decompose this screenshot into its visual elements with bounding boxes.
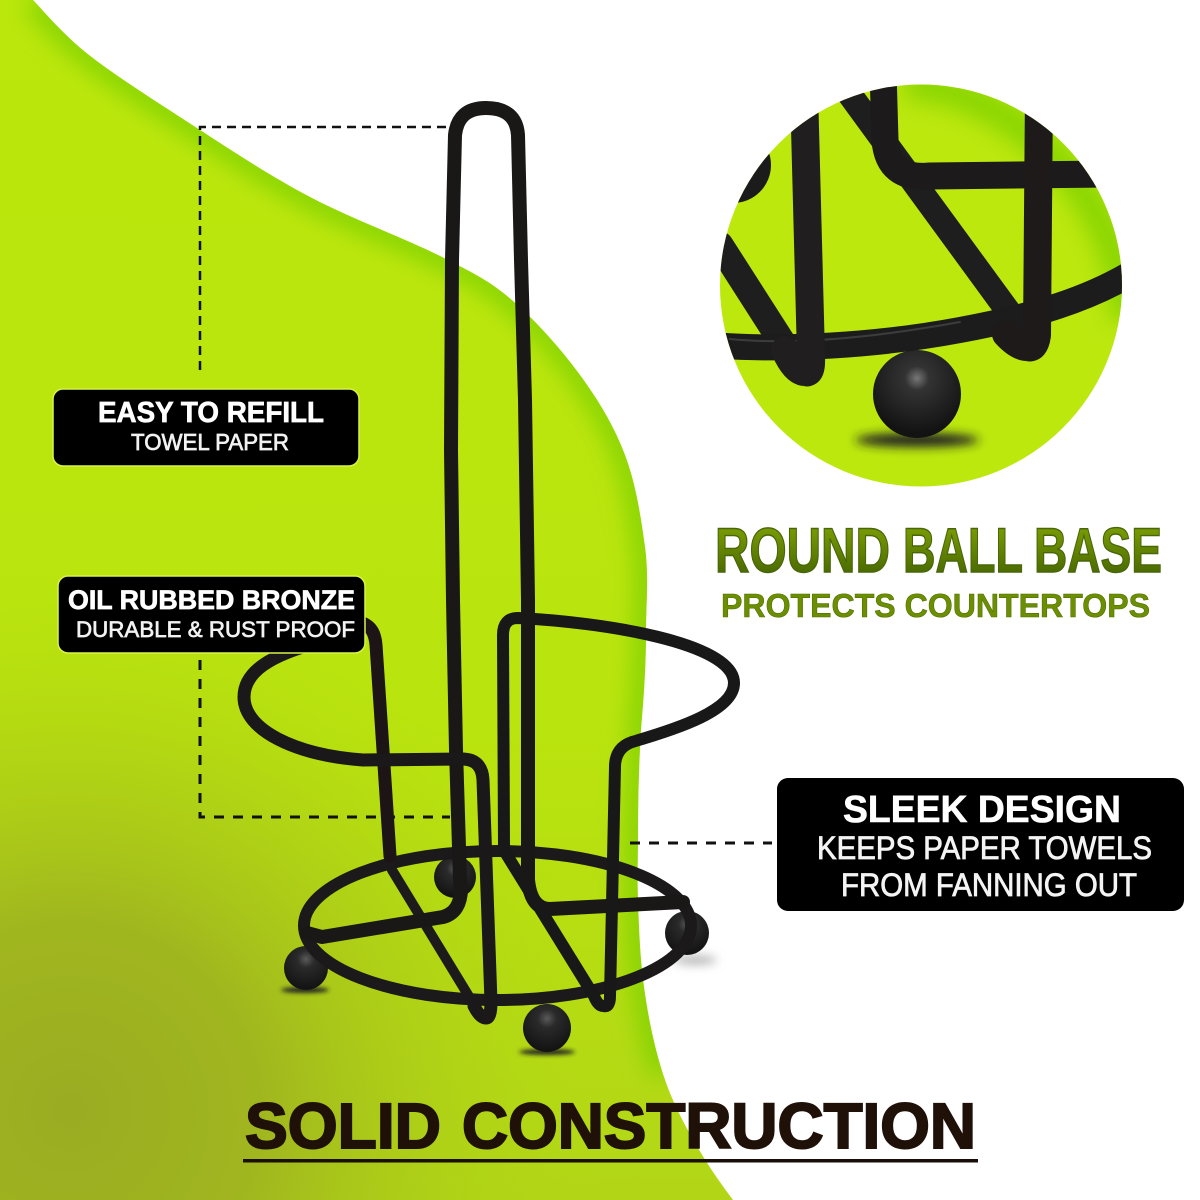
label: oil rubbed bronze: OIL RUBBED BRONZE <box>68 585 355 615</box>
zoomed diagonals <box>720 245 784 345</box>
subheading: protects countertops: PROTECTS COUNTERTOPS <box>721 587 1150 624</box>
title: solid construction: SOLID <box>245 1090 441 1162</box>
circle edge glow <box>905 85 1125 320</box>
title: solid construction: CONSTRUCTION <box>462 1090 976 1162</box>
tall post loop <box>307 108 683 937</box>
round ball base detail circle <box>720 84 1122 486</box>
dashed leader: easy to refill <box>200 127 446 372</box>
zoomed ring <box>700 268 1140 347</box>
label: sleek design: SLEEK DESIGN <box>843 789 1121 831</box>
title underline <box>243 1159 978 1162</box>
dashed leader: oil rubbed bronze <box>200 660 450 817</box>
zoomed left upright hook <box>785 90 811 372</box>
zoomed right upright hook <box>1006 90 1039 348</box>
label: sleek design <box>777 778 1184 911</box>
small ball top left <box>738 154 771 203</box>
label: sleek design: FROM FANNING OUT <box>841 867 1137 903</box>
green background shape <box>0 0 733 1200</box>
label: sleek design: KEEPS PAPER TOWELS <box>817 830 1152 866</box>
label: easy to refill <box>53 389 359 466</box>
rear upright with upper ring <box>360 622 390 856</box>
heading: round ball base <box>715 516 1162 586</box>
base ring <box>304 851 691 1000</box>
zoomed upper wire <box>883 70 1110 176</box>
paper towel holder <box>244 108 734 1055</box>
heading: round ball base: BALL <box>903 516 1023 586</box>
label: easy to refill: TOWEL PAPER <box>131 429 289 455</box>
post overlay <box>521 600 535 880</box>
right wire with upper ring <box>503 618 734 1006</box>
dashed leader: sleek design <box>630 842 772 844</box>
ball feet <box>284 856 709 1052</box>
label: oil rubbed bronze <box>58 576 365 653</box>
diagonal wires <box>392 870 476 1008</box>
label: easy to refill: EASY TO REFILL <box>98 397 324 429</box>
zoomed ball foot <box>873 350 961 438</box>
label: oil rubbed bronze: DURABLE & RUST PROOF <box>76 617 355 642</box>
ball shadow <box>855 433 979 447</box>
shadows under balls <box>281 956 717 1055</box>
heading: round ball base: ROUND <box>715 516 890 586</box>
left upper ring wire <box>244 642 491 1018</box>
